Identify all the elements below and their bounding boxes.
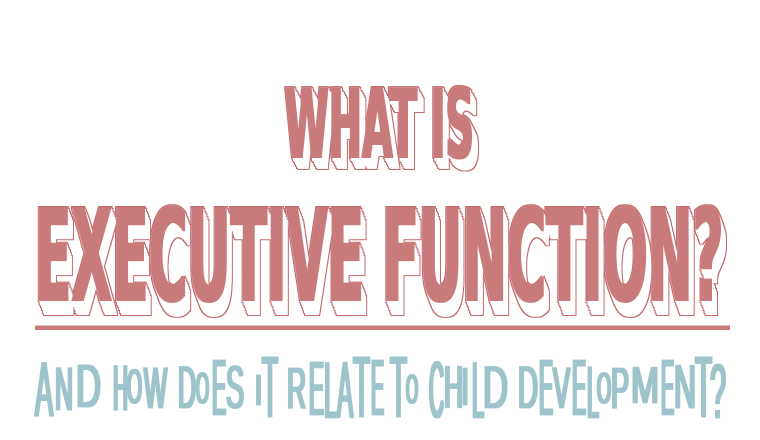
subtitle: and how does it relate to child development?: T (390, 339, 407, 436)
subtitle: and how does it relate to child development?: I (255, 366, 262, 415)
subtitle: and how does it relate to child development?: E (212, 343, 226, 432)
subtitle: and how does it relate to child development?: M (631, 357, 659, 415)
subtitle: and how does it relate to child development?: A (35, 345, 53, 433)
subtitle: and how does it relate to child development?: N (674, 353, 696, 422)
subtitle: and how does it relate to child development?: T (353, 339, 370, 436)
subtitle: and how does it relate to child development?: D (483, 354, 508, 421)
subtitle: and how does it relate to child development?: N (55, 355, 73, 423)
subtitle: and how does it relate to child development?: T (695, 339, 712, 436)
text: WHAT IS (285, 68, 474, 181)
subtitle: and how does it relate to child development?: L (472, 346, 484, 436)
title underline (35, 326, 730, 330)
subtitle: and how does it relate to child development? (35, 339, 726, 436)
subtitle: and how does it relate to child development?: H (444, 354, 463, 421)
subtitle: and how does it relate to child development?: O (196, 364, 209, 413)
subtitle: and how does it relate to child development?: L (587, 351, 599, 434)
subtitle: and how does it relate to child development?: E (539, 343, 553, 432)
subtitle: and how does it relate to child development?: E (572, 343, 586, 432)
subtitle: and how does it relate to child development?: C (429, 345, 444, 434)
subtitle: and how does it relate to child development?: D (76, 352, 101, 420)
subtitle: and how does it relate to child development?: I (461, 357, 469, 417)
subtitle: and how does it relate to child development?: O (406, 366, 418, 412)
subtitle: and how does it relate to child development?: W (144, 356, 167, 421)
subtitle: and how does it relate to child development?: T (262, 339, 278, 436)
subtitle: and how does it relate to child development?: H (113, 351, 128, 424)
subtitle: and how does it relate to child development?: O (127, 361, 142, 414)
subtitle: and how does it relate to child development?: D (178, 354, 196, 421)
subtitle: and how does it relate to child development?: E (309, 346, 324, 432)
subtitle: and how does it relate to child development?: R (287, 356, 306, 421)
subtitle: and how does it relate to child development?: O (597, 364, 611, 413)
subtitle: and how does it relate to child development?: E (371, 343, 384, 432)
subtitle: and how does it relate to child development?: P (611, 356, 629, 421)
subtitle: and how does it relate to child development?: V (553, 356, 570, 421)
subtitle: and how does it relate to child development?: S (226, 354, 244, 421)
subtitle: and how does it relate to child development?: E (661, 343, 674, 432)
subtitle: and how does it relate to child development?: D (518, 354, 538, 421)
subtitle: and how does it relate to child development?: L (324, 346, 338, 436)
text: ? (710, 349, 726, 435)
subtitle: and how does it relate to child development?: A (337, 346, 353, 436)
